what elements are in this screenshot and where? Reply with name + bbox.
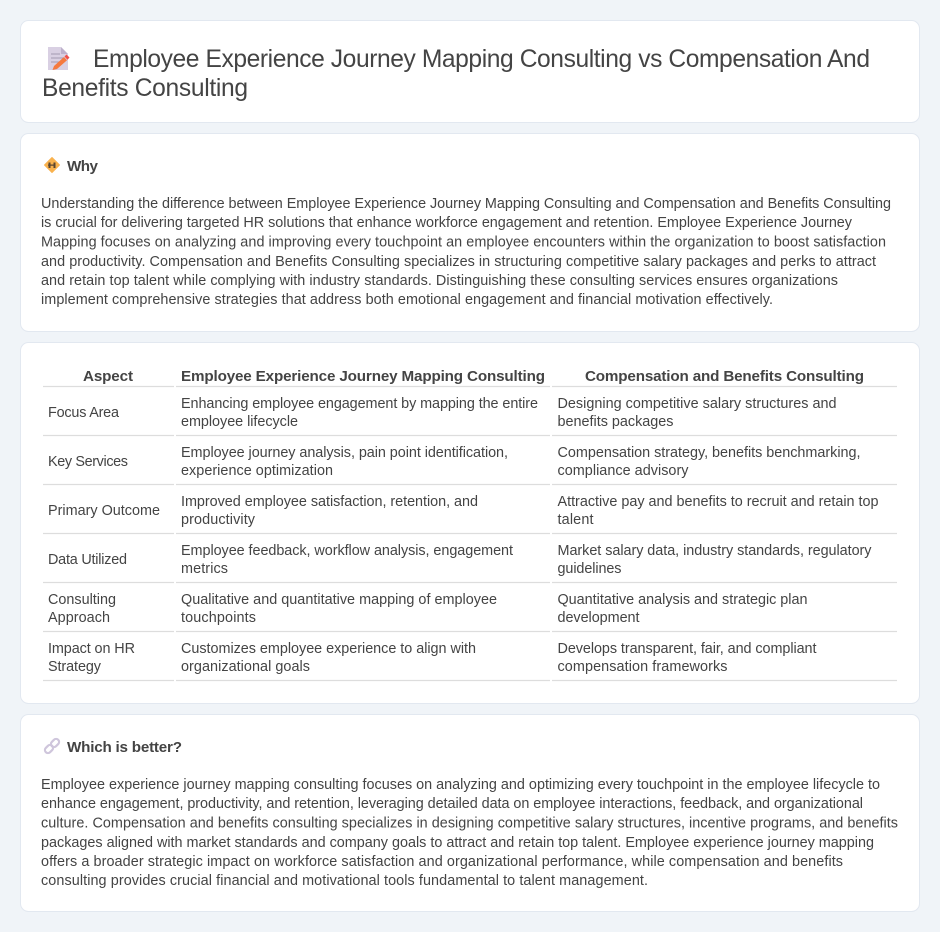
table header row: Employee Experience Journey Mapping Consulting xyxy=(181,368,545,385)
table row: key services: Key Services xyxy=(48,454,128,470)
table row: impact on hr strategy: organizational goals xyxy=(181,659,310,675)
table row: consulting approach: Consulting xyxy=(48,592,116,608)
text block: why paragraph: Understanding the difference between Employee Experience Journey Mapping Consulting and Compensation and Benefits Consulting xyxy=(41,196,891,212)
text block: why paragraph: Mapping focuses on analyzing and improving every touchpoint an employee encounters within the organization to boost satisfaction xyxy=(41,234,886,250)
table row: primary outcome: Attractive pay and benefits to recruit and retain top xyxy=(558,494,878,510)
table header row: Compensation and Benefits Consulting xyxy=(585,368,864,385)
title: Benefits Consulting xyxy=(42,75,248,102)
table row: primary outcome: Improved employee satisfaction, retention, and xyxy=(181,494,478,510)
table row: key services: Employee journey analysis, pain point identification, xyxy=(181,445,508,461)
table row: consulting approach: development xyxy=(558,610,640,626)
icon: memo with pencil xyxy=(48,47,70,70)
table row: consulting approach: Qualitative and quantitative mapping of employee xyxy=(181,592,497,608)
table row: focus area xyxy=(48,396,836,430)
table row: key services: compliance advisory xyxy=(558,463,689,479)
table header row xyxy=(83,368,864,385)
text block: which is better paragraph: offers a broader strategic impact on workforce satisfaction and organizational performance, while compensation and benefits xyxy=(41,854,843,870)
table row: primary outcome: Primary Outcome xyxy=(48,503,160,519)
table row: impact on hr strategy: Impact on HR xyxy=(48,641,135,657)
table row: data utilized: Data Utilized xyxy=(48,552,127,568)
table row: consulting approach: Quantitative analysis and strategic plan xyxy=(558,592,808,608)
panel: which is better xyxy=(20,714,920,912)
table row: impact on hr strategy xyxy=(48,641,816,675)
text block: which is better paragraph: Employee experience journey mapping consulting focuses on analyzing and optimizing every touchpoint in the employee lifecycle to xyxy=(41,777,880,793)
text block: why paragraph xyxy=(41,196,891,308)
text block: why paragraph: is crucial for delivering targeted HR solutions that enhance workforce engagement and retention. Employee Experience Journey xyxy=(41,215,853,231)
text block: which is better paragraph: packages aligned with market standards and company goals to attract and retain top talent. Employee experience journey mapping xyxy=(41,835,874,851)
table row: impact on hr strategy: Customizes employee experience to align with xyxy=(181,641,476,657)
table row: key services: Compensation strategy, benefits benchmarking, xyxy=(558,445,860,461)
text block: which is better paragraph xyxy=(41,777,898,889)
text block: which is better paragraph: enhance engagement, productivity, and retention, leveraging detailed data on employee interactions, feedback, and organizational xyxy=(41,796,863,812)
table row: data utilized: Market salary data, industry standards, regulatory xyxy=(558,543,872,559)
title: Employee Experience Journey Mapping Consulting vs Compensation And xyxy=(93,46,870,73)
table row: data utilized: guidelines xyxy=(558,561,622,577)
table row: key services: experience optimization xyxy=(181,463,333,479)
table row: impact on hr strategy: compensation frameworks xyxy=(558,659,728,675)
heading: which is better: Which is better? xyxy=(67,739,182,756)
text block: why paragraph: and retain top talent while complying with industry standards. Distinguishing these consulting services ensures organizations xyxy=(41,273,838,289)
table row: data utilized: metrics xyxy=(181,561,228,577)
title xyxy=(42,46,870,102)
table row: primary outcome xyxy=(48,494,878,528)
panel: comparison table xyxy=(20,342,920,704)
table row: impact on hr strategy: Strategy xyxy=(48,659,102,675)
icon: orange diamond sign xyxy=(44,158,60,172)
table row: consulting approach: touchpoints xyxy=(181,610,256,626)
text block: why paragraph: implement comprehensive strategies that address both emotional engagement and financial motivation effectively. xyxy=(41,292,773,308)
table row: focus area: Focus Area xyxy=(48,405,119,421)
table row: data utilized: Employee feedback, workflow analysis, engagement xyxy=(181,543,513,559)
table row: data utilized xyxy=(48,543,872,577)
heading: why: Why xyxy=(67,158,99,175)
table header row: Aspect xyxy=(83,368,133,385)
table row: impact on hr strategy: Develops transparent, fair, and compliant xyxy=(558,641,816,657)
text block: which is better paragraph: consulting provides crucial financial and motivational tools fundamental to talent management. xyxy=(41,873,648,889)
table row: focus area: Enhancing employee engagement by mapping the entire xyxy=(181,396,538,412)
panel: title card xyxy=(20,20,920,122)
table row: focus area: employee lifecycle xyxy=(181,414,298,430)
panel: why xyxy=(20,134,920,332)
table row: focus area: benefits packages xyxy=(558,414,674,430)
table row: consulting approach: Approach xyxy=(48,610,110,626)
table row: primary outcome: talent xyxy=(558,512,594,528)
table row: key services xyxy=(48,445,860,479)
icon: link xyxy=(44,738,60,754)
text block: which is better paragraph: culture. Compensation and benefits consulting specializes in designing competitive salary structures, incentive programs, and benefits xyxy=(41,816,898,832)
table row: primary outcome: productivity xyxy=(181,512,256,528)
text block: why paragraph: and productivity. Compensation and Benefits Consulting specializes in structuring competitive salary packages and perks to attract xyxy=(41,254,876,270)
table row: focus area: Designing competitive salary structures and xyxy=(558,396,836,412)
table row: consulting approach xyxy=(48,592,808,626)
